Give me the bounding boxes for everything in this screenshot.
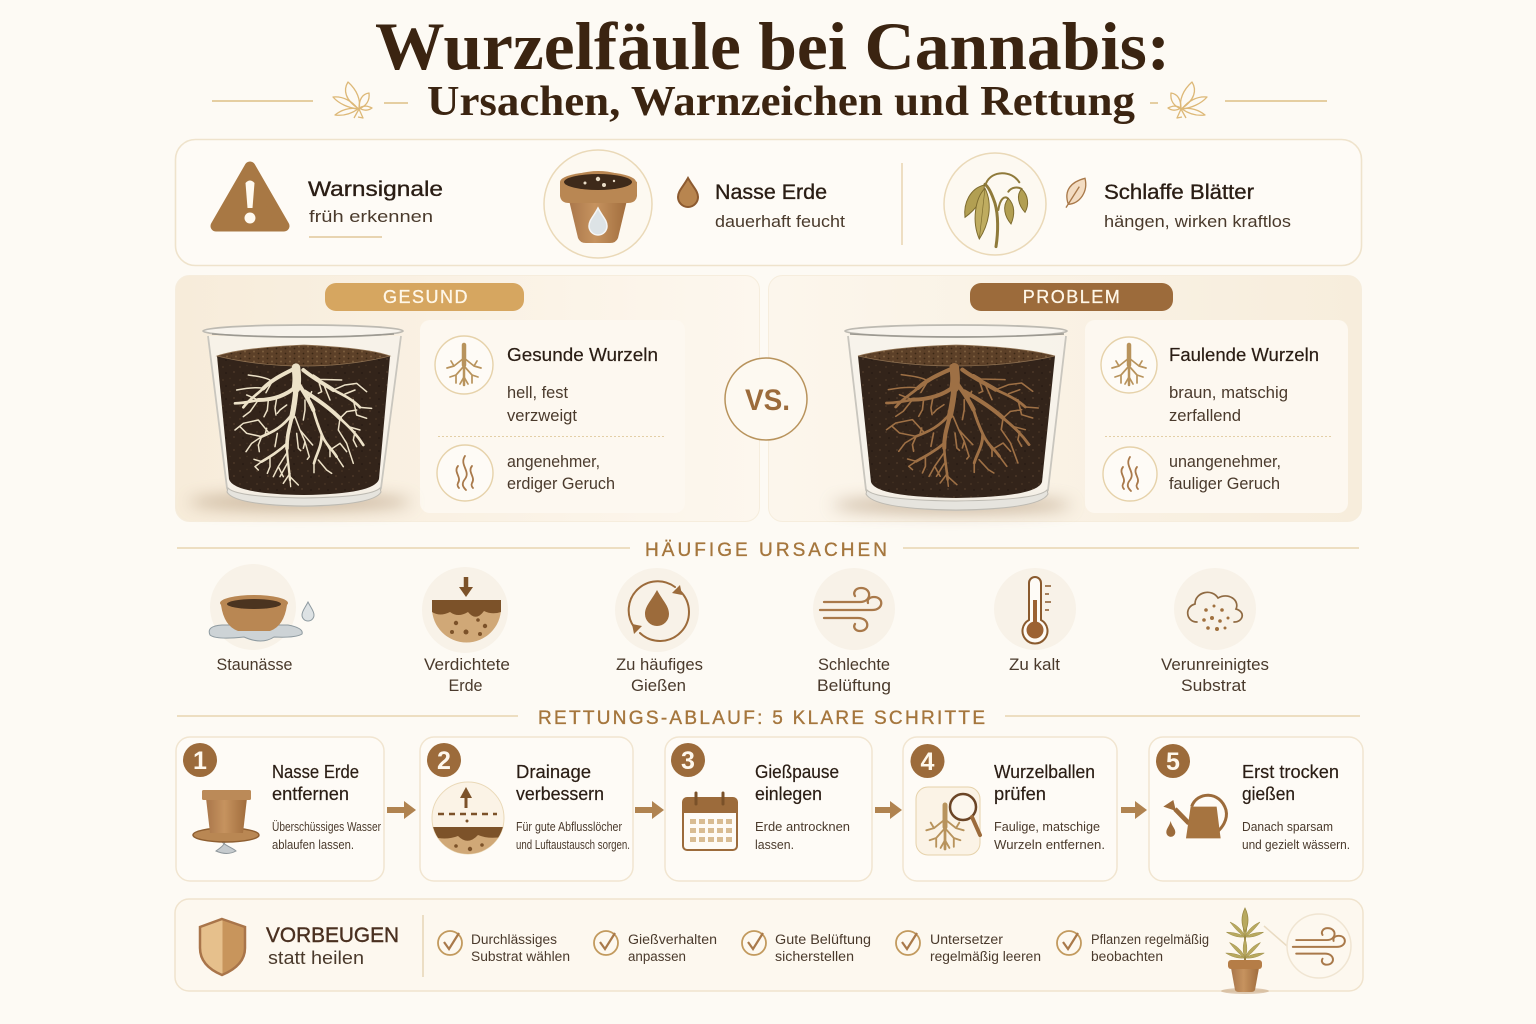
- tip 4: regelmäßig leeren: [930, 949, 1041, 964]
- tip 3: [742, 931, 871, 964]
- icon: droplet: [678, 178, 698, 207]
- text: gesunde wurzeln: [507, 345, 658, 425]
- text: vorbeugen: statt heilen: [268, 948, 364, 968]
- text: vorbeugen: [266, 924, 399, 968]
- cause: verdichtete erde: Verdichtete: [424, 656, 510, 674]
- title ornament left: [212, 82, 408, 118]
- title ornament right: [1150, 82, 1327, 118]
- label: gesund pill: [325, 283, 524, 311]
- panel: problem: [768, 276, 1362, 522]
- info box healthy: [420, 320, 685, 513]
- tip 4: Untersetzer: [930, 932, 1004, 947]
- icon: warning triangle: [216, 167, 284, 226]
- icon: root ball inspection: [916, 787, 980, 855]
- glass pot with rotting roots: [832, 325, 1072, 513]
- tip 2: [594, 931, 717, 964]
- text step 1: Überschüssiges Wasser: [272, 820, 381, 834]
- tip 1: Substrat wählen: [471, 949, 570, 964]
- text step 5: gießen: [1242, 784, 1295, 804]
- text step 3: Gießpause: [755, 762, 839, 782]
- label: problem pill: [970, 283, 1173, 311]
- text: fauliger geruch: [1169, 452, 1281, 493]
- text step 3: Erde antrocknen: [755, 820, 850, 834]
- text step 4: [994, 762, 1105, 852]
- text step 5: und gezielt wässern.: [1242, 838, 1350, 852]
- text step 3: einlegen: [755, 784, 822, 804]
- text: nasse erde: dauerhaft feucht: [715, 212, 845, 231]
- text: warnsignale: [308, 178, 443, 237]
- text step 5: Danach sparsam: [1242, 820, 1333, 834]
- text step 2: [516, 762, 630, 852]
- cause: zu kalt: Zu kalt: [1009, 656, 1060, 674]
- number 1: 1: [193, 747, 207, 775]
- text: fauliger geruch: unangenehmer,: [1169, 452, 1281, 471]
- icon: limp leaf: [1066, 178, 1086, 208]
- cause: verdichtete erde: [422, 567, 510, 695]
- panel: vorbeugen: [175, 899, 1363, 994]
- tip 1: Durchlässiges: [471, 932, 557, 947]
- text step 1: ablaufen lassen.: [272, 838, 354, 852]
- label: problem pill: PROBLEM: [1023, 287, 1121, 307]
- text: faulende wurzeln: zerfallend: [1169, 406, 1241, 425]
- icon: calendar: [683, 793, 737, 850]
- info box problem: [1085, 320, 1348, 513]
- text step 4: Faulige, matschige: [994, 820, 1100, 834]
- heading: rettungs-ablauf: RETTUNGS-ABLAUF: 5 KLARE SCHRITTE: [538, 708, 985, 729]
- text step 4: prüfen: [994, 784, 1046, 804]
- icon: healthy roots: [435, 336, 493, 394]
- text: gesunde wurzeln: verzweigt: [507, 406, 577, 425]
- cause: zu häufiges gießen: Gießen: [631, 677, 686, 695]
- text: nasse erde: [715, 181, 845, 231]
- tip 5: [1057, 931, 1209, 964]
- vs badge: VS.: [745, 384, 790, 417]
- text step 3: [755, 762, 850, 852]
- text: nasse erde: Nasse Erde: [715, 181, 827, 204]
- number 5: [1156, 744, 1190, 778]
- text step 3: lassen.: [755, 838, 794, 852]
- text step 4: Wurzeln entfernen.: [994, 838, 1105, 852]
- text: vorbeugen: VORBEUGEN: [266, 924, 399, 947]
- cause: verunreinigtes substrat: Verunreinigtes: [1161, 656, 1269, 674]
- cause: staunässe: Staunässe: [216, 656, 292, 674]
- panel: warning signals: [176, 140, 1362, 266]
- step 5: [1149, 737, 1363, 881]
- icon: wilted plant: [944, 153, 1046, 255]
- text: faulende wurzeln: Faulende Wurzeln: [1169, 345, 1319, 365]
- tip 3: sicherstellen: [775, 949, 854, 964]
- icon: cannabis plant in pot: [1221, 908, 1269, 994]
- text step 2: verbessern: [516, 784, 604, 804]
- icon: shield: [200, 919, 245, 975]
- tip 4: [896, 931, 1041, 964]
- number 4: [910, 744, 944, 778]
- step 3: [665, 737, 872, 881]
- text step 5: Erst trocken: [1242, 762, 1339, 782]
- number 3: [671, 743, 705, 777]
- number 2: [427, 743, 461, 777]
- text step 4: Wurzelballen: [994, 762, 1095, 782]
- tip 5: beobachten: [1091, 949, 1163, 964]
- number 4: 4: [921, 748, 935, 776]
- icon: rotting roots: [1101, 337, 1157, 393]
- number 1: [183, 743, 217, 777]
- title: Ursachen, Warnzeichen und Rettung: [427, 79, 1135, 125]
- cause: staunässe: [209, 564, 314, 674]
- tip 1: [438, 931, 570, 964]
- tip 2: anpassen: [628, 949, 686, 964]
- text: schlaffe blätter: hängen, wirken kraftlos: [1104, 212, 1291, 231]
- text: warnsignale: früh erkennen: [309, 207, 433, 226]
- text: erdiger geruch: [507, 452, 615, 493]
- text step 5: [1242, 762, 1350, 852]
- text: gesunde wurzeln: Gesunde Wurzeln: [507, 345, 658, 365]
- arrow 1: [387, 801, 416, 819]
- text: erdiger geruch: angenehmer,: [507, 452, 600, 471]
- icon: airflow circle: [1264, 914, 1351, 978]
- arrow 3: [875, 801, 902, 819]
- text: fauliger geruch: fauliger Geruch: [1169, 474, 1280, 493]
- cause: schlechte belüftung: Schlechte: [818, 656, 890, 674]
- number 3: 3: [681, 747, 695, 775]
- text step 2: Drainage: [516, 762, 591, 782]
- text: schlaffe blätter: Schlaffe Blätter: [1104, 181, 1254, 204]
- text: schlaffe blätter: [1104, 181, 1291, 231]
- text step 1: [272, 762, 381, 852]
- icon: drainage: [430, 782, 506, 856]
- text: erdiger geruch: erdiger Geruch: [507, 474, 615, 493]
- step 1: [176, 737, 384, 881]
- arrow 2: [635, 801, 664, 819]
- title: Wurzelfäule bei Cannabis:: [375, 8, 1170, 84]
- cause: verdichtete erde: Erde: [448, 677, 482, 695]
- number 5: 5: [1166, 748, 1180, 776]
- icon: wet soil pot: [544, 150, 652, 258]
- icon: pot on saucer: [193, 790, 259, 854]
- text step 2: und Luftaustausch sorgen.: [516, 838, 630, 852]
- glass pot with healthy roots: [188, 325, 412, 510]
- vs badge: [725, 358, 807, 440]
- cause: zu häufiges gießen: [615, 568, 703, 695]
- tip 2: Gießverhalten: [628, 932, 717, 947]
- text step 1: Nasse Erde: [272, 762, 359, 782]
- step 2: [420, 737, 633, 881]
- tip 3: Gute Belüftung: [775, 932, 871, 947]
- label: gesund pill: GESUND: [383, 287, 469, 307]
- arrow 4: [1121, 801, 1147, 819]
- heading: häufige ursachen: HÄUFIGE URSACHEN: [645, 540, 887, 561]
- text: warnsignale: Warnsignale: [308, 178, 443, 201]
- cause: zu kalt: [994, 568, 1076, 674]
- icon: earthy smell: [437, 445, 493, 501]
- tip 5: Pflanzen regelmäßig: [1091, 932, 1209, 947]
- cause: verunreinigtes substrat: [1161, 568, 1269, 695]
- icon: foul smell: [1103, 447, 1157, 501]
- text: faulende wurzeln: [1169, 345, 1319, 425]
- text: gesunde wurzeln: hell, fest: [507, 383, 568, 402]
- number 2: 2: [437, 747, 451, 775]
- cause: schlechte belüftung: Belüftung: [817, 677, 891, 695]
- panel: gesund: [176, 276, 760, 522]
- title: [375, 8, 1170, 125]
- step 4: [903, 737, 1117, 881]
- cause: verunreinigtes substrat: Substrat: [1181, 677, 1246, 695]
- cause: zu häufiges gießen: Zu häufiges: [616, 656, 703, 674]
- icon: watering can: [1163, 795, 1226, 838]
- cause: schlechte belüftung: [813, 568, 895, 695]
- text: faulende wurzeln: braun, matschig: [1169, 383, 1288, 402]
- text step 2: Für gute Abflusslöcher: [516, 820, 622, 834]
- text step 1: entfernen: [272, 784, 349, 804]
